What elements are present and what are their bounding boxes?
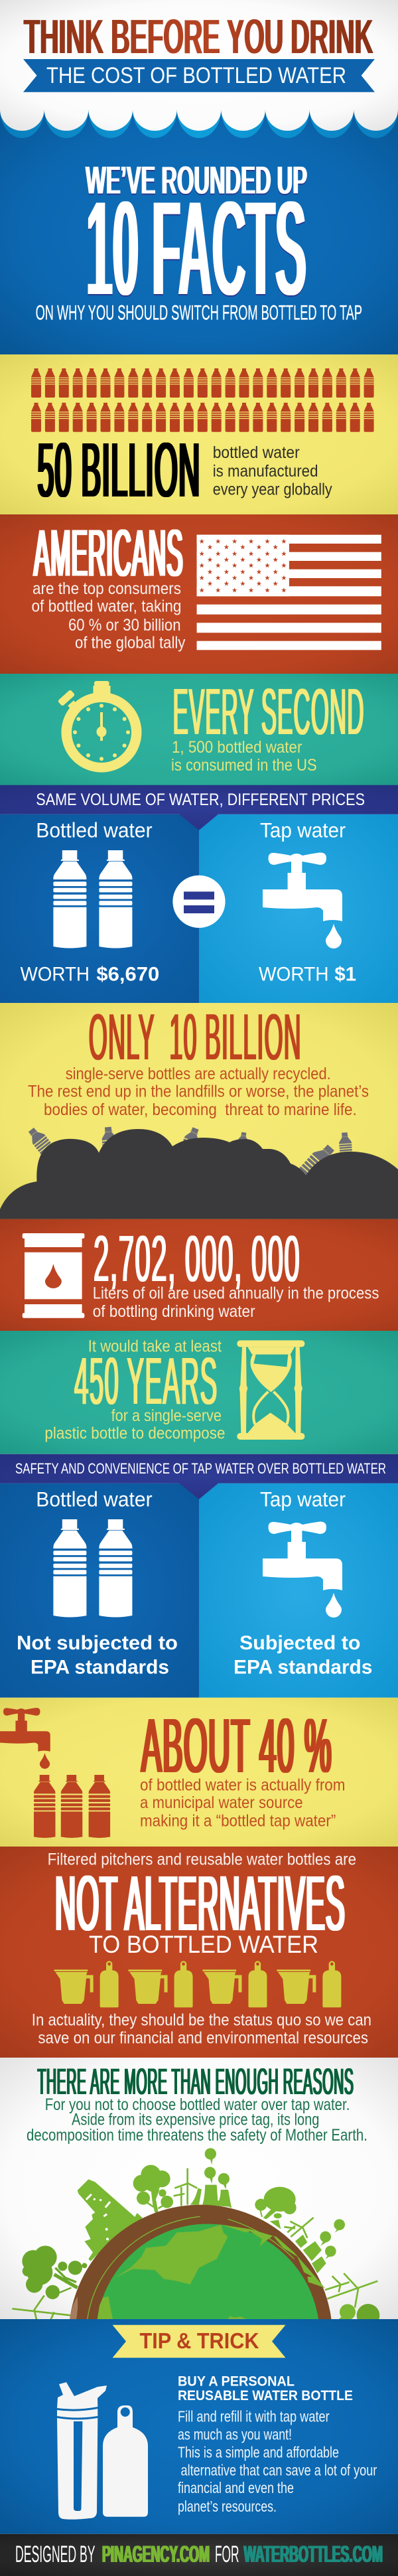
windmills right <box>284 2218 314 2238</box>
smoke <box>204 2148 230 2189</box>
left side: bottled water <box>0 814 199 1003</box>
icon: american flag <box>197 535 381 650</box>
text: municipal water source: of bottled water is actually from <box>140 1776 345 1794</box>
text: 1,500 bottled water: is consumed in the US <box>171 756 317 775</box>
text: top consumers: of bottled water, taking <box>32 597 182 616</box>
text: tip body: This is a simple and affordable <box>178 2443 339 2461</box>
tree left dark <box>22 2245 87 2299</box>
text: bottled water manufactured <box>213 443 332 499</box>
text: filtered pitchers: Filtered pitchers and reusable water bottles are <box>48 1850 356 1868</box>
icon: faucet <box>263 1521 342 1618</box>
right side: tap water <box>199 1483 398 1698</box>
text: municipal water source <box>140 1776 345 1831</box>
icon: faucet <box>263 852 342 948</box>
text: to decompose <box>44 1406 226 1443</box>
icon: faucet dripping <box>0 1708 50 1769</box>
text: municipal water source: a municipal water source <box>140 1793 303 1812</box>
icon: green globe with city and trees <box>12 2148 379 2319</box>
text: tip body <box>178 2407 377 2515</box>
right side: tap water: $1 <box>334 963 356 985</box>
heading: buy a personal bottle: REUSABLE WATER BOTTLE <box>178 2388 353 2403</box>
text: reasons body <box>27 2095 367 2145</box>
ribbon: tip and trick: TIP & TRICK <box>139 2329 259 2354</box>
panel: not alternatives <box>0 1847 398 2058</box>
text: status quo <box>32 2011 371 2047</box>
panel: safety and convenience comparison <box>0 1454 398 1698</box>
footer: credits: FOR <box>215 2541 239 2567</box>
text: bottled water manufactured: is manufactured <box>213 462 318 481</box>
text: reasons body: Aside from its expensive price tag, its long <box>72 2111 319 2129</box>
icon: landfill pile <box>0 1129 398 1219</box>
text: municipal water source: making it a “bottled tap water” <box>140 1812 336 1831</box>
ribbon: subtitle: THE COST OF BOTTLED WATER <box>46 63 346 88</box>
right side: tap water: WORTH <box>259 963 329 985</box>
text: tip body: financial and even the <box>178 2479 294 2496</box>
left side: bottled water: WORTH <box>21 963 90 985</box>
panel: tip and trick <box>0 2319 398 2534</box>
tree lower right dark <box>357 2304 379 2319</box>
text: to decompose: for a single-serve <box>111 1406 222 1425</box>
text: top consumers: are the top consumers <box>33 579 181 598</box>
panel: americans <box>0 514 398 674</box>
icon: oil barrel <box>23 1233 84 1318</box>
text: liters of oil: of bottling drinking water <box>93 1302 255 1321</box>
globe land <box>98 2225 325 2319</box>
text: tip body: as much as you want! <box>178 2426 292 2443</box>
cooling towers <box>190 2185 232 2208</box>
right side: tap water: Tap water <box>260 1487 346 1511</box>
windmills top <box>174 2168 197 2206</box>
right side: tap water: EPA standards <box>233 1657 372 1679</box>
subheading: to bottled water: TO BOTTLED WATER <box>89 1931 318 1958</box>
icon: hourglass <box>237 1340 304 1440</box>
ribbon: tip and trick <box>113 2325 285 2358</box>
text: to decompose: plastic bottle to decompose <box>44 1424 226 1443</box>
text: top consumers: 60 % or 30 billion <box>68 616 180 635</box>
tree right <box>255 2187 297 2229</box>
buildings right <box>295 2235 326 2273</box>
right side: tap water: Subjected to <box>239 1632 360 1654</box>
text: it would take: It would take at least <box>88 1337 222 1356</box>
windmill left <box>12 2295 71 2319</box>
panel: blue intro <box>0 110 398 354</box>
building left <box>78 2179 143 2261</box>
left side: bottled water: $6,670 <box>96 963 159 985</box>
left side: bottled water: Bottled water <box>36 818 153 842</box>
banner: same volume <box>0 785 398 830</box>
left side: bottled water: EPA standards <box>31 1657 169 1679</box>
icon: bottle rows <box>31 368 374 432</box>
right side: tap water <box>199 814 398 1003</box>
banner: safety and convenience <box>0 1454 398 1499</box>
icon: two bottles <box>53 850 132 948</box>
heading: buy a personal bottle <box>178 2374 353 2403</box>
panel: more than enough reasons <box>0 2058 398 2319</box>
panel: price comparison <box>0 785 398 1003</box>
heading: buy a personal bottle: BUY A PERSONAL <box>178 2374 295 2389</box>
icon: reusable sport bottle <box>57 2382 107 2520</box>
icon: stopwatch <box>58 681 141 773</box>
globe ocean <box>97 2224 318 2319</box>
text: bottled water manufactured: bottled water <box>213 443 300 462</box>
text: recycled: bodies of water, becoming threat to marine life. <box>44 1100 357 1119</box>
left side: bottled water: Bottled water <box>36 1487 153 1511</box>
left side: bottled water <box>0 1483 199 1698</box>
text: top consumers: of the global tally <box>75 634 186 652</box>
ribbon: subtitle <box>23 59 375 92</box>
icon: equals sign <box>172 875 226 928</box>
panel: 50 billion bottles <box>0 354 398 514</box>
panel: every second <box>0 674 398 785</box>
panel: 450 years <box>0 1331 398 1454</box>
footer: credits: DESIGNED BY <box>15 2541 96 2567</box>
text: status quo: save on our financial and environmental resources <box>38 2028 368 2047</box>
icon: three bottles <box>34 1775 110 1838</box>
footer: credits: PINAGENCY.COM <box>102 2541 210 2567</box>
icon: discarded bottles <box>25 1125 354 1198</box>
icon: pitchers and reusable bottles <box>54 1961 341 2007</box>
text: 1,500 bottled water <box>171 738 317 775</box>
windmill lower right <box>325 2273 377 2308</box>
smoke right <box>320 2219 345 2259</box>
panel: oil usage <box>0 1219 398 1331</box>
footer: credits <box>0 2534 398 2576</box>
text: bottled water manufactured: every year globally <box>213 481 332 499</box>
small tree lower right <box>338 2304 356 2320</box>
text: liters of oil <box>93 1284 379 1321</box>
text: tip body: Fill and refill it with tap water <box>178 2407 330 2425</box>
text: recycled: single-serve bottles are actually recycled. <box>66 1065 331 1083</box>
panel: title header with waves <box>0 0 398 138</box>
panel: only 10 billion <box>0 1000 398 1219</box>
panel: about 40 percent <box>0 1698 398 1847</box>
text: recycled <box>28 1065 369 1119</box>
text: top consumers <box>32 579 186 652</box>
icon: reusable flask <box>103 2405 148 2517</box>
tree top <box>133 2165 173 2212</box>
text: 1,500 bottled water: 1, 500 bottled water <box>172 738 302 757</box>
icon: two bottles <box>53 1519 132 1617</box>
text: tip body: planet’s resources. <box>178 2498 277 2515</box>
globe ring <box>70 2205 332 2319</box>
left side: bottled water: Not subjected to <box>17 1632 178 1654</box>
right side: tap water: Tap water <box>260 818 346 842</box>
